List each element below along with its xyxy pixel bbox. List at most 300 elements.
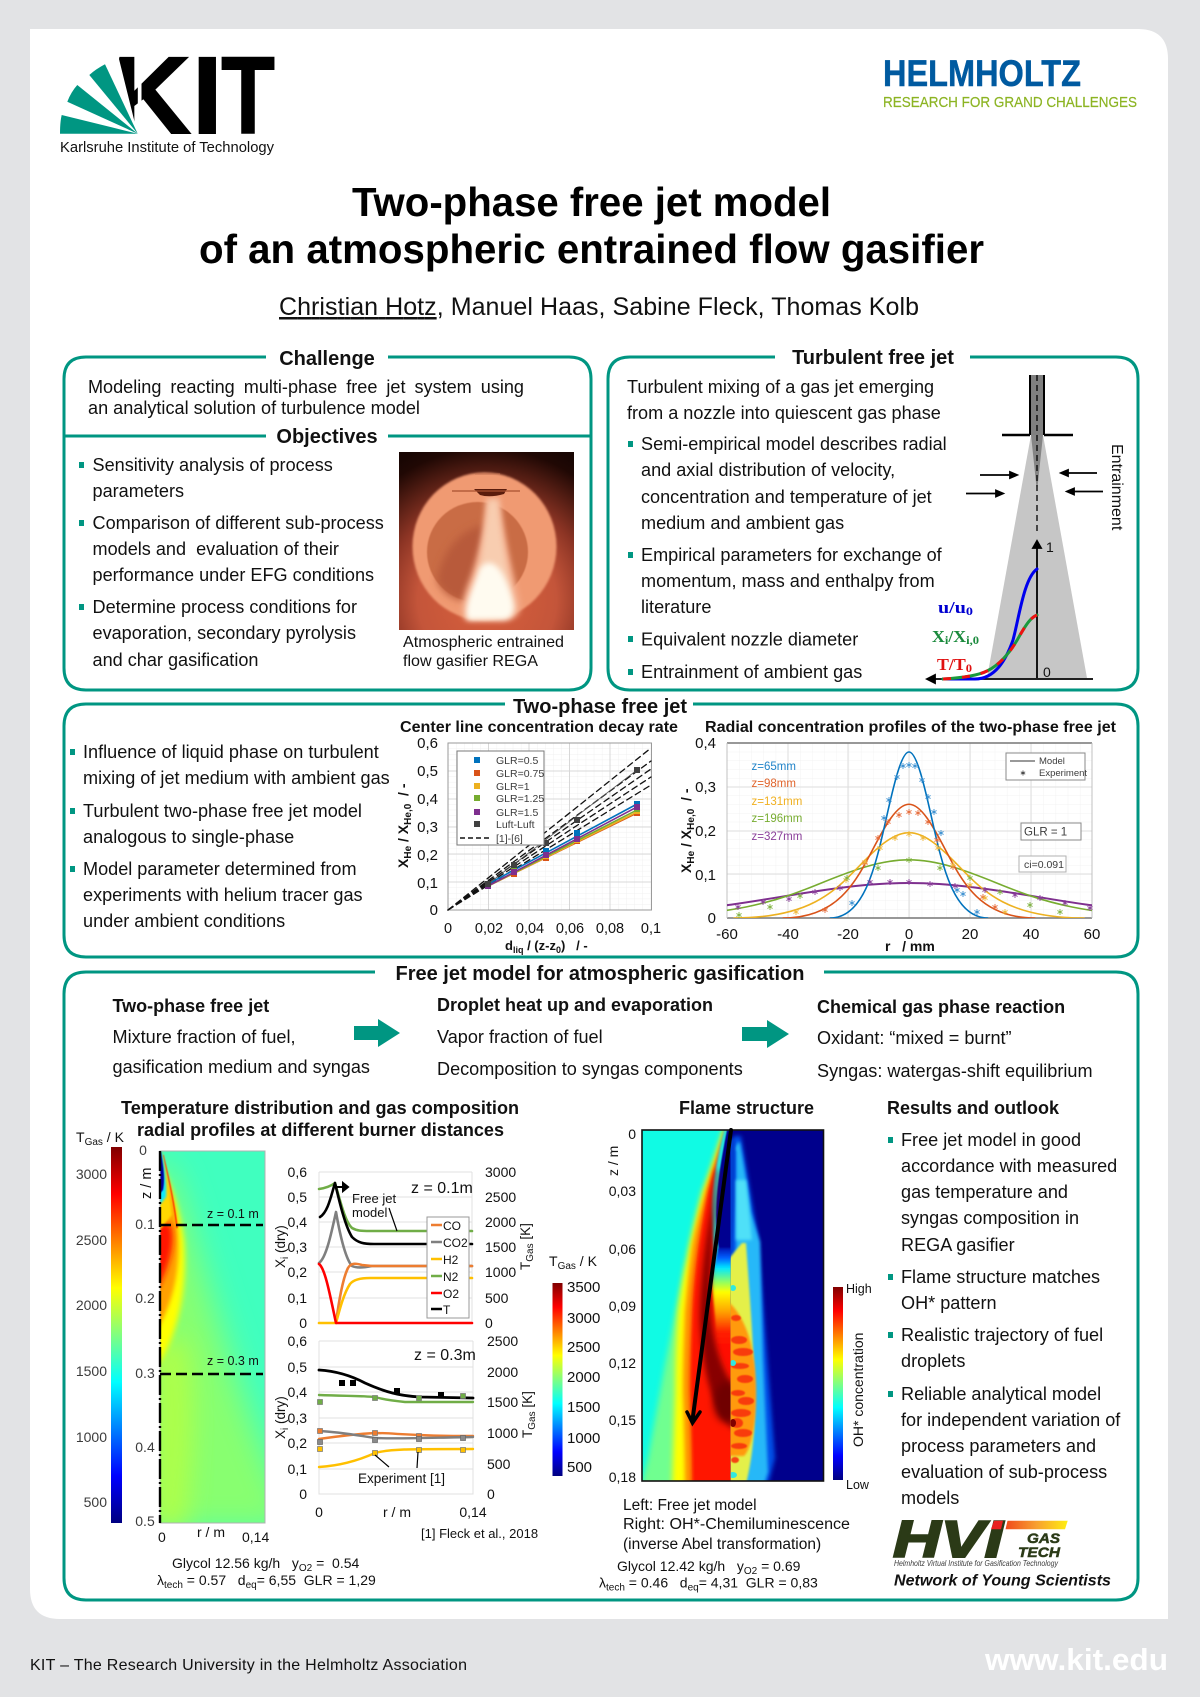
logo small wordmark: TECH	[1018, 1544, 1061, 1560]
left half: free jet model	[642, 1130, 731, 1480]
caption: flame map: Left: Free jet model	[623, 1497, 757, 1514]
objectives bullets: evaporation, secondary pyrolysis	[92, 623, 356, 643]
step: two-phase free jet	[112, 996, 370, 1077]
chart legend	[457, 751, 544, 845]
chart legend: GLR=1.5	[496, 807, 538, 819]
y axis numbers: 0,3	[417, 819, 438, 836]
dashed line: z = 0.3 m: z = 0.3 m	[207, 1354, 259, 1368]
chart: profiles z = 0.1 m	[273, 1164, 536, 1331]
objectives bullets: models and evaluation of their	[92, 539, 339, 559]
z labels: z=98mm	[752, 778, 796, 790]
heading: Free jet model for atmospheric gasification	[396, 963, 804, 985]
results bullets: evaluation of sub-process	[901, 1462, 1107, 1482]
x axis numbers	[444, 921, 661, 937]
chart: center line decay	[395, 719, 678, 955]
arrow	[742, 1020, 789, 1048]
operating conditions middle: = 0.46 d	[625, 1574, 688, 1590]
left numbers: 0,5	[288, 1359, 307, 1375]
axis titles	[273, 1223, 536, 1270]
chart legend: Luft-Luft	[496, 819, 535, 831]
operating conditions left: O2	[299, 1563, 313, 1574]
z axis numbers: 0.4	[135, 1439, 155, 1455]
operating conditions middle: = 4,31 GLR = 0,83	[699, 1574, 818, 1590]
results bullets: Reliable analytical model	[901, 1384, 1101, 1404]
x axis numbers	[716, 926, 1100, 943]
colorbar: OH* concentration: OH* concentration	[850, 1333, 866, 1447]
y axis label: He	[686, 850, 697, 864]
free jet model callout	[352, 1191, 397, 1231]
caption: flame map: Right: OH*-Chemiluminescence	[623, 1516, 850, 1533]
colorbar: gas temperature left: T	[76, 1129, 85, 1145]
y axis numbers: 0,4	[695, 735, 716, 752]
x axis label: ) / -	[561, 938, 588, 953]
data lines	[488, 770, 637, 886]
right numbers: 3000	[485, 1164, 516, 1180]
colorbar: gas temperature middle: 1500	[567, 1399, 600, 1416]
authors: Christian Hotz, Manuel Haas, Sabine Fleck, Thomas Kolb	[279, 293, 919, 321]
x axis numbers: 20	[962, 926, 978, 943]
axis titles: i	[280, 1257, 291, 1259]
logo caption: Helmholtz Virtual Institute for Gasification Technology	[894, 1558, 1059, 1568]
y axis numbers	[695, 735, 716, 927]
z label: z = 0.1m	[411, 1180, 473, 1197]
label: GLR	[1021, 823, 1081, 840]
results bullets: Realistic trajectory of fuel	[901, 1325, 1103, 1345]
right numbers: 500	[485, 1290, 509, 1306]
left numbers: 0,1	[288, 1461, 307, 1477]
operating conditions middle: λ	[599, 1574, 606, 1590]
axis titles: T	[518, 1262, 533, 1270]
left numbers: 0,4	[288, 1384, 307, 1400]
results bullets: droplets	[901, 1351, 965, 1371]
step: chemical gas phase	[817, 997, 1093, 1081]
z label: z = 0.3m	[414, 1347, 476, 1364]
left numbers: 0,4	[288, 1214, 307, 1230]
arrows: entrainment	[966, 470, 1103, 496]
title: of an atmospheric entrained flow gasifier	[199, 226, 984, 272]
axis titles: (dry)	[273, 1396, 288, 1428]
z labels: z=327mm	[752, 831, 802, 843]
intro text	[627, 377, 941, 423]
label: ci	[1019, 856, 1066, 872]
operating conditions left: λ	[157, 1572, 164, 1588]
step: droplet heat up: Vapor fraction of fuel	[437, 1027, 603, 1047]
chart title: Center line concentration decay rate	[400, 719, 678, 736]
legend: normalised profiles: /X	[947, 627, 967, 646]
x axis numbers: 60	[1084, 926, 1100, 943]
model curves	[727, 751, 1092, 918]
x axis label: d	[505, 938, 513, 953]
x axis label: liq	[513, 945, 523, 955]
challenge text: Modeling reacting multi-phase free jet system using	[88, 377, 524, 397]
logo: Helmholtz	[883, 53, 1137, 111]
x axis numbers: 0,02	[475, 921, 503, 937]
legend: normalised profiles: 0	[966, 604, 973, 618]
caption: flame map	[623, 1497, 850, 1553]
objectives bullets: Comparison of different sub-process	[92, 513, 384, 533]
bullets: Empirical parameters for exchange of	[641, 545, 943, 565]
axis titles: (dry)	[273, 1225, 288, 1257]
legend: N2	[443, 1270, 459, 1284]
series lines	[319, 1183, 472, 1323]
heatmap: flame structure	[605, 1126, 824, 1490]
step: two-phase free jet: Two-phase free jet	[112, 996, 269, 1016]
experiment callout	[358, 1452, 445, 1486]
r axis labels	[158, 1524, 269, 1545]
operating conditions left: Glycol 12.56 kg/h y	[172, 1555, 299, 1571]
z axis numbers: 0	[139, 1142, 147, 1158]
colorbar: gas temperature middle	[549, 1253, 600, 1476]
colorbar: gas temperature left: 2000	[76, 1297, 107, 1313]
heading: temperature distribution	[121, 1098, 519, 1140]
results bullets: models	[901, 1488, 959, 1508]
y axis numbers: 0,1	[695, 867, 716, 884]
photo: gasifier flame	[399, 452, 574, 630]
r axis labels: 0	[158, 1529, 166, 1545]
bullets: experiments with helium tracer gas	[83, 885, 363, 905]
z axis label: z / m	[605, 1146, 621, 1176]
colorbar: OH* concentration	[833, 1282, 872, 1492]
y axis numbers: 0,2	[695, 823, 716, 840]
bullets: Influence of liquid phase on turbulent	[83, 742, 379, 762]
bullets	[628, 434, 947, 682]
x axis numbers: 0,1	[641, 921, 661, 937]
data markers	[488, 770, 637, 886]
right numbers: 500	[487, 1456, 511, 1472]
z axis numbers	[135, 1142, 155, 1529]
x axis label: r / mm	[885, 938, 935, 954]
right numbers: 2500	[487, 1333, 518, 1349]
step: chemical gas phase: Syngas: watergas-shift equilibrium	[817, 1061, 1093, 1081]
y axis numbers	[417, 735, 438, 919]
r axis labels: 0,14	[242, 1529, 269, 1545]
z axis numbers: 0.3	[135, 1365, 155, 1381]
dashed line: z = 0.1 m: z = 0.1 m	[207, 1207, 259, 1221]
experiment callout: Experiment [1]	[358, 1471, 445, 1486]
results bullets: OH* pattern	[901, 1293, 997, 1313]
colorbar: gas temperature left: / K	[103, 1129, 125, 1145]
z axis numbers	[609, 1126, 636, 1485]
axis numbers	[1043, 539, 1054, 680]
x axis numbers: -60	[716, 926, 738, 943]
r axis labels: r / m	[197, 1524, 225, 1540]
z axis numbers: 0.1	[135, 1216, 155, 1232]
axes	[927, 541, 1093, 683]
z axis numbers: 0,06	[609, 1241, 636, 1257]
results bullets: REGA gasifier	[901, 1235, 1015, 1255]
series lines	[319, 1370, 473, 1467]
logo wordmark: KI	[110, 35, 223, 158]
x axis numbers: 40	[1023, 926, 1039, 943]
right numbers: 2500	[485, 1189, 516, 1205]
panel: free jet model for atmospheric gasification	[64, 963, 1138, 1600]
chart legend: GLR=0.5	[496, 755, 538, 767]
colorbar: gas temperature middle: 3000	[567, 1310, 600, 1327]
operating conditions left: tech	[164, 1580, 183, 1591]
challenge text	[88, 377, 524, 418]
bullets: Entrainment of ambient gas	[641, 662, 862, 682]
left numbers: 0,6	[288, 1164, 307, 1180]
objectives bullets: performance under EFG conditions	[92, 565, 374, 585]
challenge text: an analytical solution of turbulence model	[88, 398, 420, 418]
logo small wordmark	[1018, 1530, 1061, 1560]
caption: flame map: (inverse Abel transformation)	[623, 1536, 821, 1553]
axis titles: [K]	[520, 1391, 535, 1411]
photo caption: flow gasifier REGA	[403, 653, 538, 670]
axis titles: i	[280, 1428, 291, 1430]
legend	[427, 1217, 469, 1318]
objectives bullets: Sensitivity analysis of process	[92, 455, 333, 475]
colorbar: gas temperature left: 1500	[76, 1363, 107, 1379]
results bullets: syngas composition in	[901, 1208, 1079, 1228]
bullets: Model parameter determined from	[83, 859, 357, 879]
operating conditions middle: tech	[606, 1582, 625, 1594]
arrow: droplet trajectory	[687, 1130, 731, 1423]
colorbar: gas temperature middle: 3500	[567, 1279, 600, 1296]
step: droplet heat up: Decomposition to syngas components	[437, 1059, 743, 1079]
z axis numbers: 0,09	[609, 1298, 636, 1314]
operating conditions left: = 0.54	[312, 1555, 359, 1571]
results bullets: accordance with measured	[901, 1156, 1117, 1176]
right numbers: 0	[485, 1315, 493, 1331]
y axis label: He	[403, 845, 414, 859]
Helmholtz tagline: RESEARCH FOR GRAND CHALLENGES	[883, 94, 1137, 111]
left numbers: 0,1	[288, 1290, 307, 1306]
legend: normalised profiles: X	[932, 627, 944, 646]
z axis numbers: 0.2	[135, 1290, 155, 1306]
y axis label: / X	[678, 829, 694, 851]
logo: KIT	[60, 35, 275, 158]
bullets: concentration and temperature of jet	[641, 487, 932, 507]
photo caption	[403, 634, 564, 670]
colorbar: gas temperature left: Gas	[85, 1137, 103, 1148]
icon: fan mask	[100, 50, 142, 140]
footer text: KIT – The Research University in the Helmholtz Association	[30, 1657, 467, 1674]
y axis numbers: 0,6	[417, 735, 438, 752]
axis titles: T	[520, 1430, 535, 1438]
x axis labels: 0	[315, 1504, 323, 1520]
right numbers: 1500	[485, 1239, 516, 1255]
title: Two-phase free jet model	[352, 179, 831, 225]
operating conditions left: = 6,55 GLR = 1,29	[257, 1572, 376, 1588]
intro text: from a nozzle into quiescent gas phase	[627, 403, 941, 423]
z labels: z=131mm	[752, 796, 802, 808]
y axis numbers: 0,2	[417, 847, 438, 864]
x axis numbers: -20	[837, 926, 859, 943]
colorbar: gas temperature left: 500	[84, 1494, 107, 1510]
bullets: medium and ambient gas	[641, 513, 844, 533]
bullets: analogous to single-phase	[83, 827, 294, 847]
right numbers: 2000	[485, 1214, 516, 1230]
axis titles: Gas	[527, 1411, 538, 1430]
axis numbers: 1	[1046, 539, 1054, 555]
y axis label: / -	[678, 788, 694, 809]
profile curves	[943, 569, 1037, 679]
x axis labels: 0,14	[459, 1504, 487, 1520]
results bullets: Flame structure matches	[901, 1267, 1100, 1287]
chart legend: GLR=0.75	[496, 768, 544, 780]
heading: temperature distribution: radial profiles at different burner distances	[137, 1120, 504, 1140]
heading: flame structure: Flame structure	[679, 1098, 814, 1118]
step: two-phase free jet: Mixture fraction of fuel,	[112, 1027, 296, 1047]
label: GLR: GLR = 1	[1024, 826, 1067, 838]
chart title: Radial concentration profiles of the two-phase free jet	[705, 719, 1117, 736]
y axis label: / -	[395, 783, 411, 804]
panel: turbulent free jet	[608, 347, 1138, 690]
y axis label: / X	[395, 824, 411, 846]
z labels: z=65mm	[752, 761, 796, 773]
bullets	[70, 742, 390, 931]
bullets: mixing of jet medium with ambient gas	[83, 768, 390, 788]
colorbar: gas temperature middle: 1000	[567, 1430, 600, 1447]
logo: HVI network	[893, 1511, 1111, 1590]
bullets: under ambient conditions	[83, 911, 285, 931]
network label: Network of Young Scientists	[894, 1572, 1111, 1590]
free jet model callout: Free jet	[352, 1191, 396, 1206]
legend: normalised profiles	[932, 598, 979, 675]
x axis numbers: 0,06	[556, 921, 584, 937]
citation: [1] Fleck et al., 2018	[421, 1526, 538, 1541]
x axis numbers: -40	[777, 926, 799, 943]
results bullets: for independent variation of	[901, 1410, 1121, 1430]
legend: normalised profiles: 0	[966, 661, 972, 675]
chart legend: GLR=1	[496, 781, 530, 793]
heading: turbulent free jet: Turbulent free jet	[792, 347, 954, 369]
axis titles: Gas	[525, 1243, 536, 1262]
arrow	[354, 1019, 400, 1047]
left numbers: 0	[299, 1315, 307, 1331]
bullets: and axial distribution of velocity,	[641, 460, 895, 480]
z axis numbers: 0,15	[609, 1412, 636, 1428]
x axis labels	[315, 1504, 487, 1520]
bullets: literature	[641, 597, 711, 617]
colorbar: gas temperature left: 2500	[76, 1232, 107, 1248]
axis titles: X	[273, 1430, 288, 1439]
objectives bullets: parameters	[92, 481, 184, 501]
left numbers: 0,2	[288, 1435, 307, 1451]
left numbers: 0,3	[288, 1239, 307, 1255]
right numbers: 1500	[487, 1394, 518, 1410]
intro text: Turbulent mixing of a gas jet emerging	[627, 377, 934, 397]
operating conditions middle: Glycol 12.42 kg/h y	[617, 1558, 744, 1574]
photo caption: Atmospheric entrained	[403, 634, 564, 651]
objectives bullets	[79, 455, 384, 670]
operating conditions middle: = 0.69	[757, 1558, 801, 1574]
y axis label: He,0	[403, 803, 414, 825]
step: chemical gas phase: Chemical gas phase reaction	[817, 997, 1065, 1017]
heading: objectives: Objectives	[276, 426, 378, 448]
left numbers	[288, 1164, 307, 1331]
legend: H2	[443, 1253, 459, 1267]
panel: challenge and objectives	[64, 348, 591, 690]
step: two-phase free jet: gasification medium and syngas	[112, 1057, 370, 1077]
y axis numbers: 0,5	[417, 763, 438, 780]
dashed literature lines	[448, 748, 651, 910]
chart: profiles z = 0.3 m	[273, 1333, 538, 1541]
y axis numbers: 0,3	[695, 779, 716, 796]
logo small wordmark: GAS	[1027, 1530, 1061, 1546]
colorbar: gas temperature left: 3000	[76, 1166, 107, 1182]
legend: CO	[443, 1219, 461, 1233]
heading: results and outlook: Results and outlook	[887, 1098, 1060, 1118]
logo wordmark: HVI	[893, 1511, 1005, 1569]
axis titles: X	[273, 1259, 288, 1268]
heatmap: temperature field	[136, 1146, 269, 1544]
right numbers: 1000	[487, 1425, 518, 1441]
z labels: z=196mm	[752, 813, 802, 825]
logo caption: Karlsruhe Institute of Technology	[60, 140, 275, 156]
heading: challenge: Challenge	[279, 348, 375, 370]
bullets: Equivalent nozzle diameter	[641, 630, 858, 650]
step: droplet heat up	[437, 995, 743, 1079]
operating conditions left: eq	[246, 1580, 257, 1591]
y axis label: X	[395, 859, 411, 868]
axis titles	[273, 1391, 538, 1439]
operating conditions left: = 0.57 d	[183, 1572, 246, 1588]
results bullets: Free jet model in good	[901, 1130, 1081, 1150]
colorbar: OH* concentration: Low	[846, 1478, 870, 1492]
chart: radial profiles	[681, 720, 1116, 952]
logo bars	[991, 1521, 1068, 1529]
axis dash-dot	[159, 1151, 161, 1523]
label: ci: ci=0.091	[1024, 859, 1064, 871]
footer url: www.kit.edu	[984, 1642, 1168, 1677]
left numbers: 0,6	[288, 1333, 307, 1349]
colorbar: gas temperature middle: Gas	[558, 1261, 576, 1272]
bullets: momentum, mass and enthalpy from	[641, 571, 935, 591]
colorbar: gas temperature left: 1000	[76, 1429, 107, 1445]
label: entrainment: Entrainment	[1108, 444, 1125, 531]
arrow: T axis	[337, 1183, 348, 1191]
experiment stars	[738, 765, 1090, 915]
results bullets: process parameters and	[901, 1436, 1096, 1456]
operating conditions middle: eq	[688, 1582, 699, 1594]
z axis label: z / m	[139, 1168, 155, 1199]
legend: model and experiment: Experiment	[1039, 768, 1087, 779]
legend: normalised profiles: T/T	[937, 655, 964, 674]
legend: O2	[443, 1287, 459, 1301]
legend: T	[443, 1303, 451, 1317]
colorbar: gas temperature middle: 2500	[567, 1339, 600, 1356]
left numbers: 0,5	[288, 1189, 307, 1205]
x axis label: 0	[556, 945, 561, 955]
y axis numbers: 0	[708, 910, 716, 927]
axis titles: [K]	[518, 1223, 533, 1243]
Helmholtz wordmark: HELMHOLTZ	[883, 53, 1081, 94]
legend: normalised profiles: u/u	[938, 598, 962, 617]
z labels	[752, 761, 802, 843]
z axis numbers: 0,18	[609, 1469, 636, 1485]
heading: temperature distribution: Temperature distribution and gas composition	[121, 1098, 519, 1118]
right numbers: 0	[487, 1486, 495, 1502]
x axis numbers: 0,08	[596, 921, 624, 937]
y axis numbers: 0,1	[417, 875, 438, 892]
left numbers	[288, 1333, 307, 1502]
operating conditions middle	[599, 1558, 818, 1594]
colorbar: gas temperature middle: 2000	[567, 1369, 600, 1386]
z axis numbers: 0.5	[135, 1513, 155, 1529]
heading: two-phase free jet: Two-phase free jet	[513, 696, 687, 718]
y axis label: He,0	[686, 808, 697, 830]
bullets: Turbulent two-phase free jet model	[83, 801, 362, 821]
chart legend: GLR=1.25	[496, 793, 544, 805]
x axis numbers: 0	[905, 926, 913, 943]
logo wordmark: T	[221, 35, 275, 158]
colorbar: gas temperature middle: 500	[567, 1459, 592, 1476]
y axis numbers: 0,4	[417, 791, 438, 808]
operating conditions left	[157, 1555, 376, 1591]
experiment markers	[320, 1383, 463, 1453]
